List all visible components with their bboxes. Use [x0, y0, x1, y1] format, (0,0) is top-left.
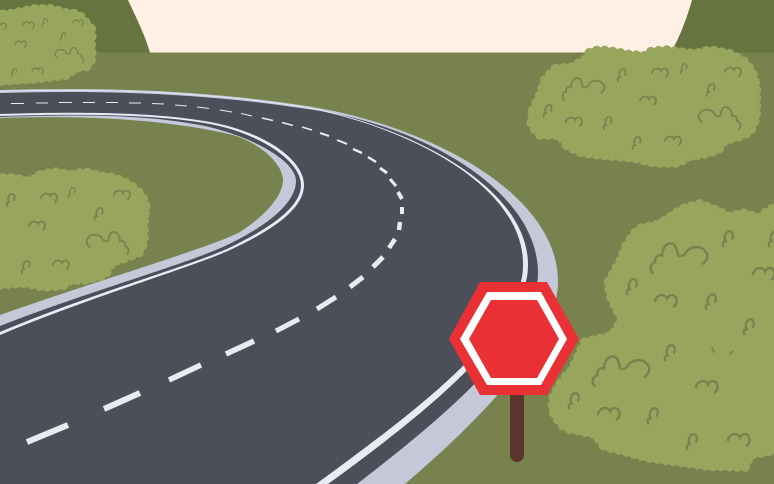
sign: post: [510, 385, 524, 462]
bush: top left: [0, 9, 92, 84]
sign: [449, 282, 579, 462]
road: centre dashes: [11, 102, 402, 442]
road: inner curb: [0, 116, 296, 326]
inner grass island: [0, 117, 283, 315]
road: [0, 89, 558, 484]
road: outer curb: [0, 89, 558, 484]
background: sky: [128, 0, 692, 52]
road: inner gap: [0, 115, 301, 332]
road: inner edge line: [0, 113, 304, 335]
sign: white border: [460, 292, 567, 385]
road: asphalt: [0, 92, 538, 484]
sign: red centre: [469, 300, 559, 378]
road: outer edge line: [0, 90, 528, 484]
background: dark hills: [0, 0, 774, 53]
bush: top right: [531, 50, 756, 163]
bush: lower right: [552, 204, 774, 467]
sign: red hexagon: [449, 282, 579, 395]
bush: left middle: [0, 172, 146, 287]
